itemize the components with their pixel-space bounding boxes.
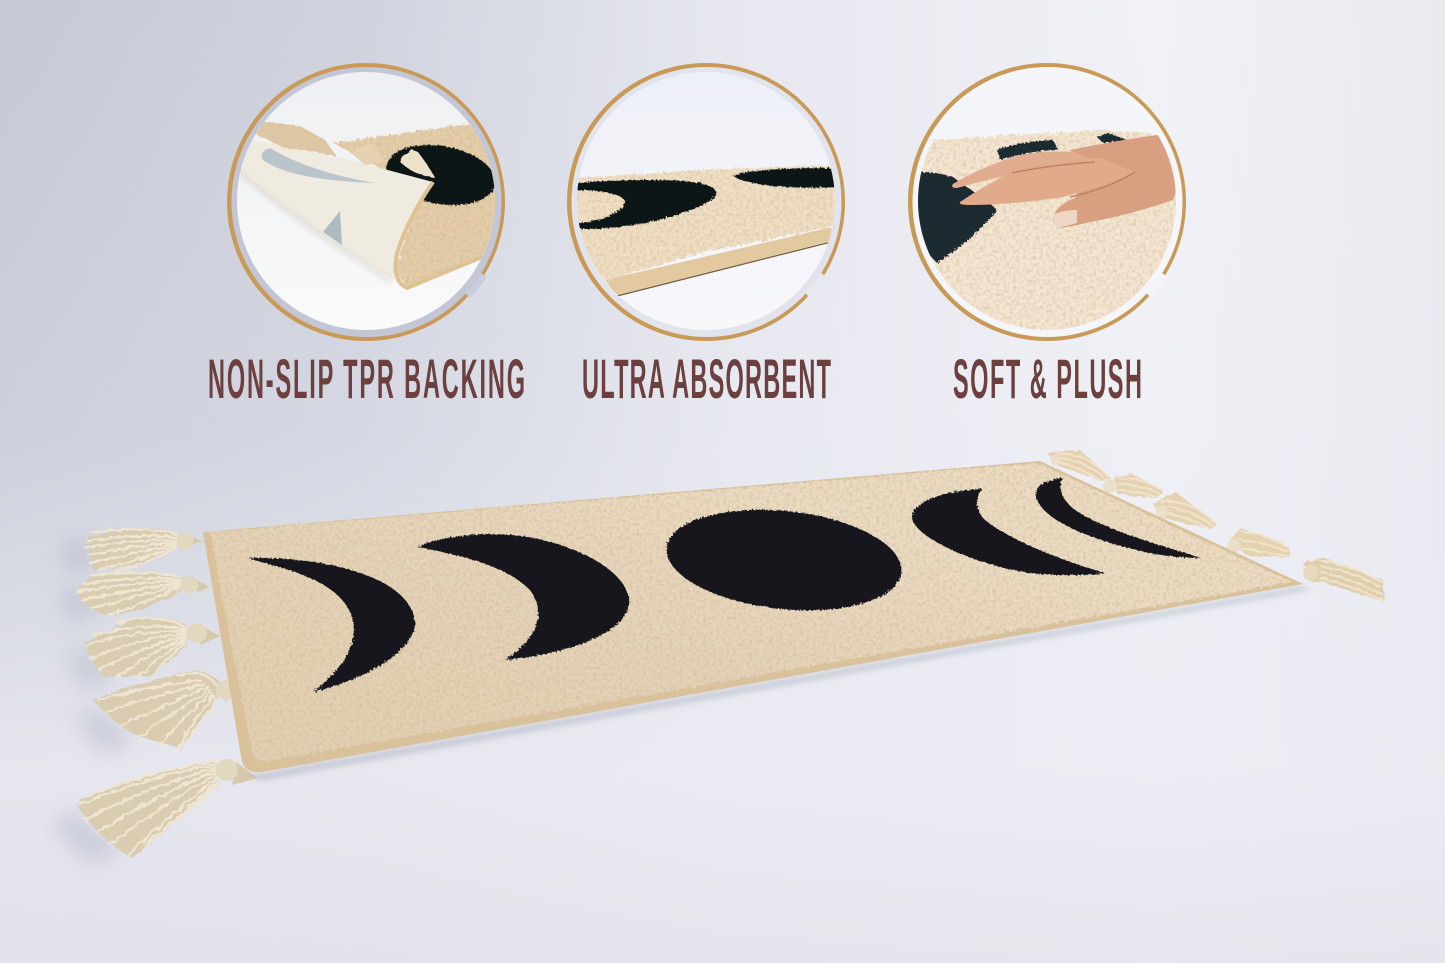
feature: ultra absorbent [567, 63, 845, 341]
tassel 4 [93, 671, 236, 748]
tassel 1 [86, 528, 203, 572]
waxing crescent [1036, 478, 1201, 558]
photo: side view of thick rug pile [575, 72, 836, 330]
waning crescent [247, 558, 415, 692]
photo: rug corner folded over showing backing [237, 72, 500, 330]
tassel 6 [1047, 450, 1110, 481]
hand [952, 135, 1176, 228]
feature: non-slip backing [227, 63, 505, 341]
gold ring [227, 63, 505, 341]
floor shadows [50, 535, 135, 865]
rug binding border [203, 461, 1303, 772]
moon phases [247, 478, 1201, 692]
main product: moon phase rug [50, 450, 1385, 865]
waxing gibbous [912, 489, 1105, 575]
gold ring [567, 63, 845, 341]
right tassels [1047, 450, 1385, 602]
tassel 8 [1152, 493, 1218, 529]
rug pile [210, 463, 1292, 761]
label: non-slip TPR backing: NON-SLIP TPR BACKING [208, 348, 525, 411]
tassel 7 [1103, 473, 1163, 498]
rug contact shadow [250, 586, 1310, 781]
left tassels [77, 528, 258, 858]
label: ultra absorbent: ULTRA ABSORBENT [582, 348, 831, 411]
full moon [662, 499, 906, 621]
tassel 9 [1227, 528, 1290, 557]
tassel 10 [1303, 558, 1385, 602]
tassel 3 [85, 618, 220, 678]
tassel 5 [77, 759, 258, 858]
feature: soft and plush [908, 63, 1186, 341]
tassel 2 [77, 573, 209, 616]
label: soft and plush: SOFT & PLUSH [953, 348, 1142, 411]
photo: hand pressing on plush pile [918, 129, 1176, 330]
gold ring [908, 63, 1186, 341]
waning gibbous [417, 534, 629, 660]
